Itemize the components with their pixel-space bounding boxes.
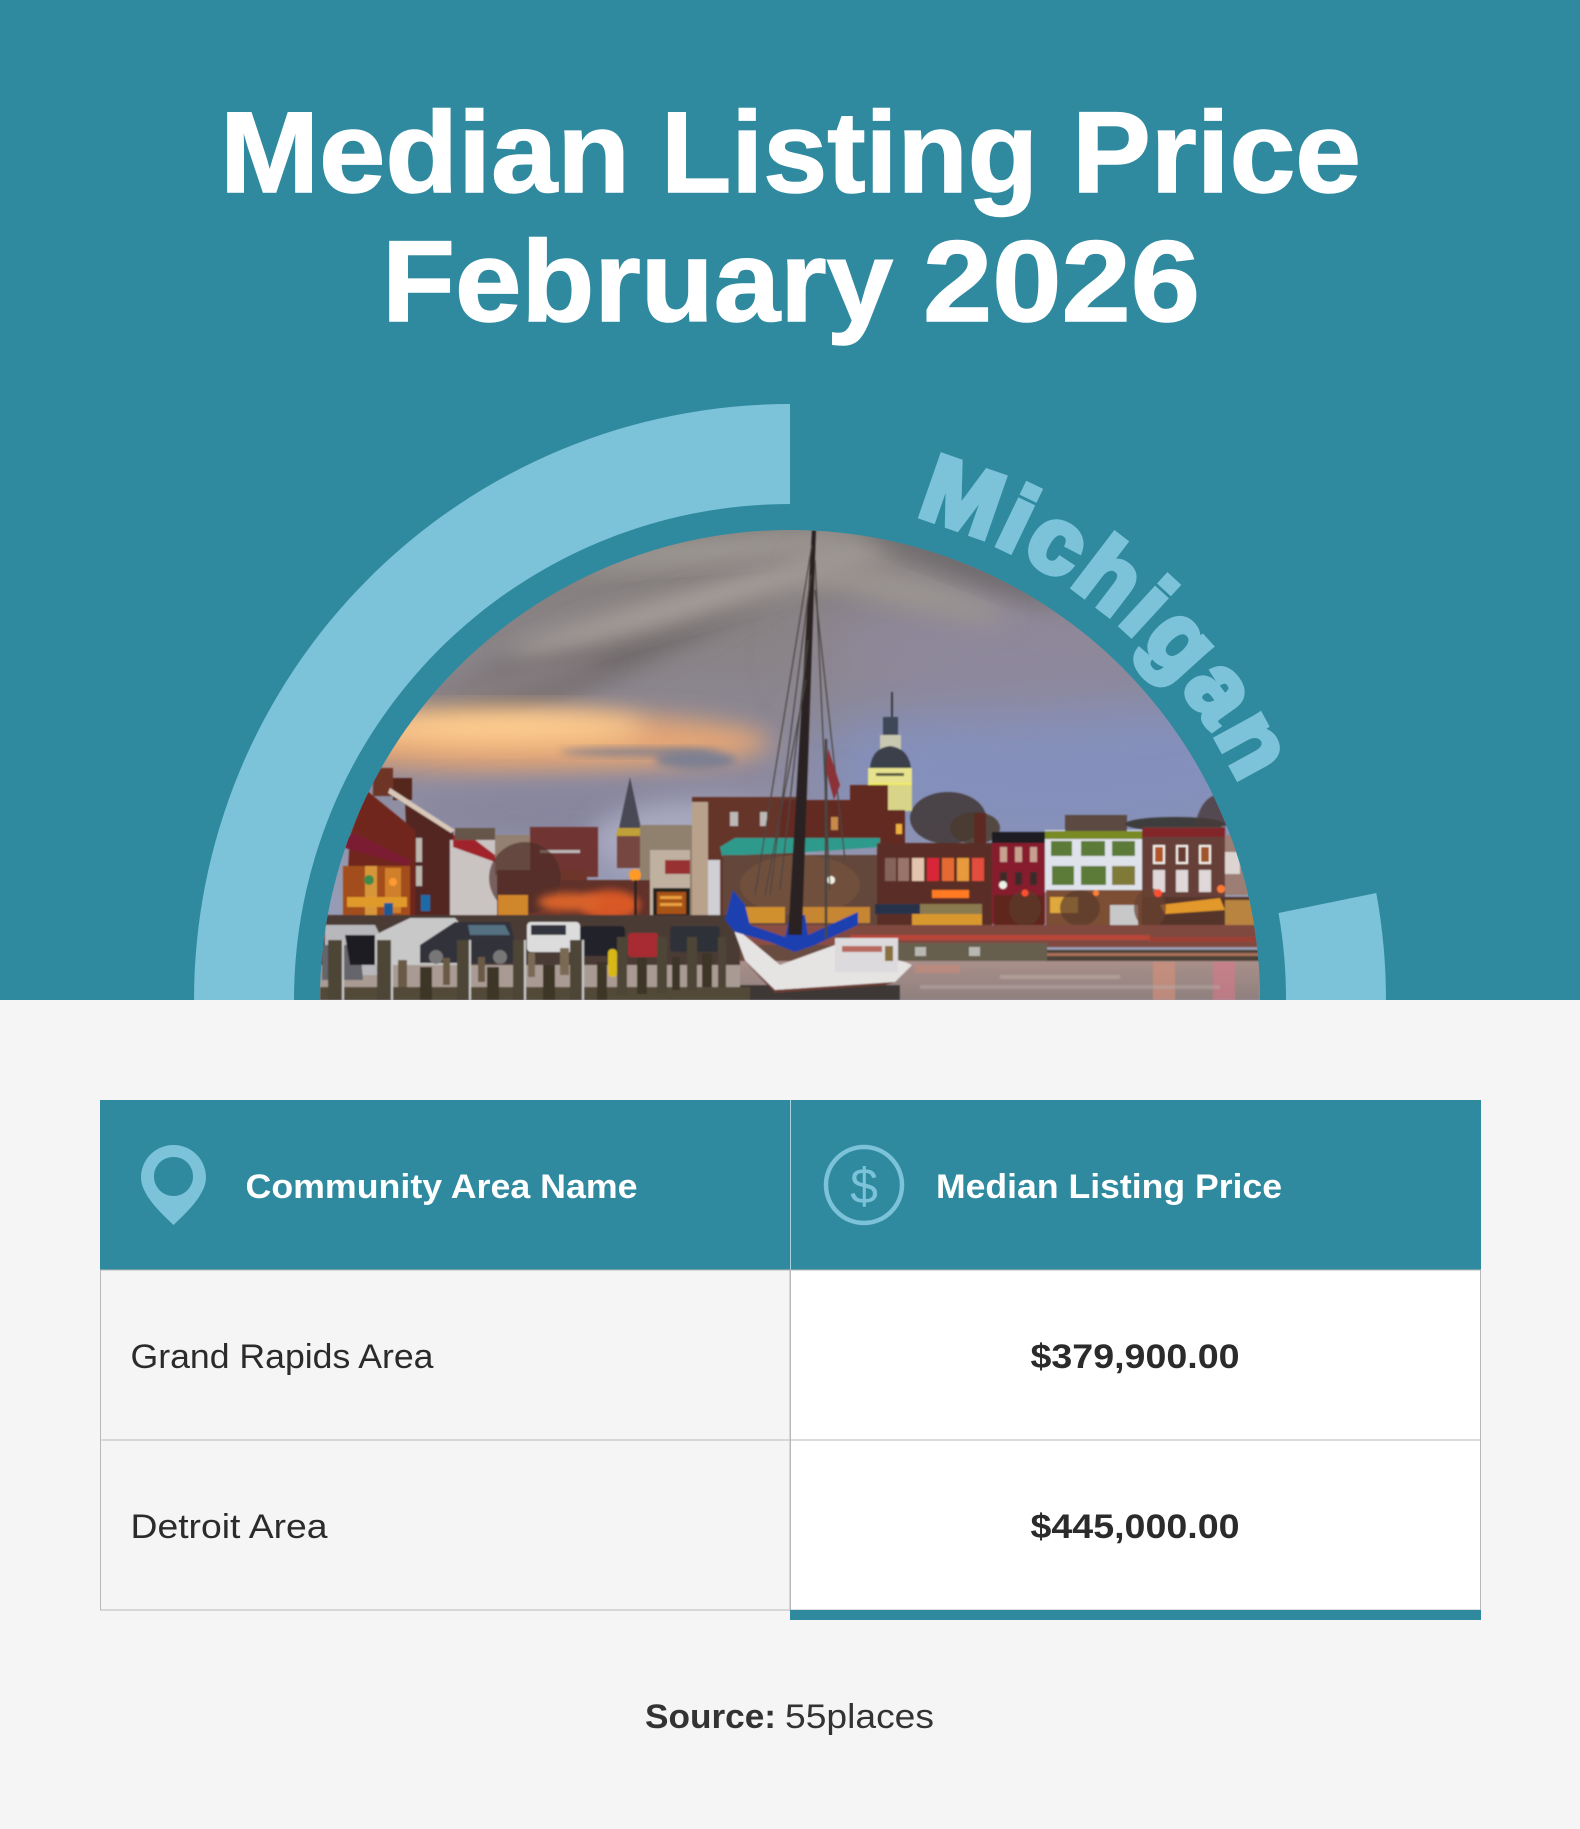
ground behind the boat [739, 944, 834, 962]
title: Price [1072, 89, 1361, 217]
table row: Detroit Area: Detroit Area [130, 1508, 328, 1546]
sky and clouds [320, 530, 1260, 1000]
central brick building [692, 797, 797, 922]
teal accent bar under price column [790, 1610, 1481, 1620]
capitol dome [868, 692, 912, 811]
source note: 55places [785, 1698, 934, 1736]
icon: dollar coin: $ [850, 1158, 878, 1214]
white townhouse with green trim [1045, 830, 1142, 926]
table row: Grand Rapids Area: $379,900.00 [1030, 1338, 1240, 1376]
harbor photo illustration [320, 530, 1260, 1000]
promenade and quay wall [835, 925, 1260, 963]
curved state label: Michigan: Michigan [918, 452, 1280, 782]
icon: location pin [141, 1145, 206, 1225]
dock posts [328, 937, 726, 1000]
title: Median [220, 89, 630, 217]
table header: median listing price [790, 1100, 1481, 1270]
title: Listing [661, 89, 1038, 217]
red-brick row house and distant skyline [1065, 795, 1260, 899]
title: February [382, 218, 893, 346]
red townhouse [992, 832, 1045, 925]
waterfront brick building with lit windows [875, 843, 992, 926]
title [220, 89, 1361, 346]
table row: Grand Rapids Area: Grand Rapids Area [130, 1338, 434, 1376]
decorative ring: left arc [194, 404, 790, 1000]
street buildings and spire [450, 777, 695, 925]
source note: Source: [645, 1698, 776, 1736]
street and parked cars [320, 915, 750, 1000]
digital sign [653, 888, 690, 918]
sailboat [725, 530, 912, 993]
teal header band [0, 0, 1580, 1000]
rear brick building and trees [780, 785, 1000, 845]
table row: Grand Rapids Area [100, 1270, 1480, 1440]
header label: median listing price: Median Listing Price [936, 1168, 1282, 1206]
green copper roof [719, 836, 882, 946]
harbor water [725, 961, 1260, 1000]
icon: dollar coin [826, 1147, 902, 1223]
table header: community area name [100, 1100, 790, 1270]
source note [645, 1698, 934, 1736]
data table [100, 1100, 1481, 1620]
header label: community area name: Community Area Name [246, 1168, 638, 1206]
left brick buildings [343, 768, 455, 926]
title: 2026 [923, 218, 1200, 346]
decorative ring: right arc [1278, 893, 1386, 1000]
table row: Detroit Area: $445,000.00 [1030, 1508, 1240, 1546]
table row: Detroit Area [100, 1440, 1480, 1610]
shoreline storefronts [827, 876, 1260, 930]
